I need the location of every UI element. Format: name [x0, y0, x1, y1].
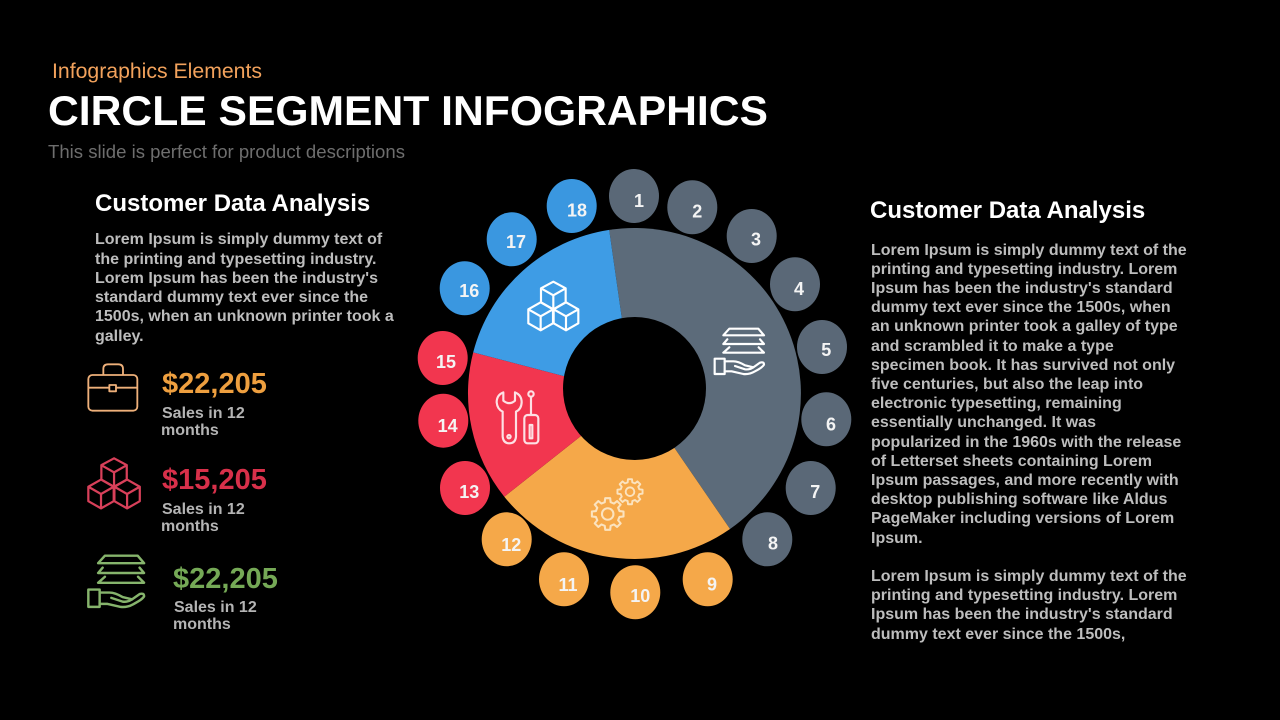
bubble 13: 13 — [459, 482, 479, 502]
right paragraphs: an unknown printer took a galley of type — [871, 318, 1178, 335]
segment: red — [468, 352, 634, 497]
bubble 1: 1 — [634, 191, 644, 211]
bubble 6 — [801, 392, 851, 446]
bubble 11 — [539, 552, 589, 606]
donut hole — [563, 317, 706, 460]
bubble 12: 12 — [501, 535, 521, 555]
bubble 17: 17 — [506, 232, 526, 252]
bubble 5 — [797, 320, 847, 374]
segment: gray — [609, 228, 801, 529]
left paragraph: galley. — [95, 328, 144, 345]
right paragraphs: specimen book. It has survived not only — [871, 357, 1175, 374]
right paragraphs: printing and typesetting industry. Lorem — [871, 587, 1177, 604]
bubble 8: 8 — [768, 534, 778, 554]
stat: green sales — [88, 556, 278, 633]
icon: wrench and screwdriver — [497, 391, 538, 443]
bubble 1 — [609, 169, 659, 223]
right paragraphs: essentially unchanged. It was — [871, 414, 1096, 431]
right paragraphs: Ipsum has been the industry's standard — [871, 606, 1173, 623]
title: CIRCLE SEGMENT INFOGRAPHICS — [48, 87, 768, 134]
right paragraphs: and scrambled it to make a type — [871, 338, 1114, 355]
green caption: Sales in 12 — [174, 599, 257, 616]
bubble 16 — [440, 261, 490, 315]
right paragraphs: Lorem Ipsum is simply dummy text of the — [871, 568, 1187, 585]
icon: cubes red — [88, 458, 140, 508]
bubble 7: 7 — [810, 482, 820, 502]
icon: hand with layers green — [88, 556, 144, 607]
bubble 14: 14 — [438, 416, 458, 436]
bubble 15 — [418, 331, 468, 385]
bubble 4: 4 — [794, 279, 804, 299]
bubble 9: 9 — [707, 574, 717, 594]
bubble 14 — [418, 394, 468, 448]
eyebrow label: Infographics Elements — [52, 60, 262, 83]
numbered bubbles ring — [418, 169, 851, 619]
icon: cubes — [528, 282, 578, 330]
icon: briefcase — [88, 364, 137, 411]
segment: blue — [473, 230, 634, 388]
right paragraphs: Ipsum. — [871, 530, 923, 547]
left paragraph: the printing and typesetting industry. — [95, 251, 376, 268]
green caption: months — [173, 616, 231, 633]
panel: right customer data analysis — [870, 197, 1191, 643]
bubble 7 — [786, 461, 836, 515]
bubble 11: 11 — [558, 575, 578, 595]
orange caption: months — [161, 422, 219, 439]
right paragraphs: dummy text ever since the 1500s, — [871, 626, 1125, 643]
bubble 2 — [667, 180, 717, 234]
panel: left customer data analysis — [88, 190, 398, 633]
left paragraph: Lorem Ipsum is simply dummy text of — [95, 231, 383, 248]
bubble 3: 3 — [751, 230, 761, 250]
bubble 12 — [482, 512, 532, 566]
orange value: $22,205 — [162, 368, 267, 400]
bubble 17 — [487, 212, 537, 266]
right paragraphs: popularized in the 1960s with the release — [871, 434, 1181, 451]
donut chart with segments — [468, 228, 801, 559]
green value: $22,205 — [173, 563, 278, 595]
right paragraphs: of Letterset sheets containing Lorem — [871, 453, 1152, 470]
red caption: months — [161, 518, 219, 535]
bubble 4 — [770, 257, 820, 311]
red value: $15,205 — [162, 464, 267, 496]
stat: orange sales — [88, 364, 267, 439]
right paragraphs: electronic typesetting, remaining — [871, 395, 1122, 412]
right paragraphs: Lorem Ipsum is simply dummy text of the — [871, 242, 1187, 259]
left paragraph: standard dummy text ever since the — [95, 289, 368, 306]
stat: red sales — [88, 458, 267, 535]
bubble 15: 15 — [436, 352, 456, 372]
bubble 9 — [683, 552, 733, 606]
right paragraphs: five centuries, but also the leap into — [871, 376, 1143, 393]
right paragraphs: Ipsum passages, and more recently with — [871, 472, 1179, 489]
left paragraph: Lorem Ipsum has been the industry's — [95, 270, 378, 287]
bubble 18: 18 — [567, 200, 587, 220]
bubble 16: 16 — [459, 281, 479, 301]
bubble 18 — [547, 179, 597, 233]
bubble 8 — [742, 512, 792, 566]
bubble 13 — [440, 461, 490, 515]
orange caption: Sales in 12 — [162, 405, 245, 422]
segment: orange — [504, 388, 730, 559]
bubble 2: 2 — [692, 202, 702, 222]
right paragraphs: desktop publishing software like Aldus — [871, 491, 1167, 508]
right paragraphs: Ipsum has been the industry's standard — [871, 280, 1173, 297]
left paragraph: 1500s, when an unknown printer took a — [95, 308, 394, 325]
header — [48, 60, 768, 162]
subtitle: This slide is perfect for product descriptions — [48, 141, 405, 162]
bubble 10 — [610, 565, 660, 619]
red caption: Sales in 12 — [162, 501, 245, 518]
right paragraphs: printing and typesetting industry. Lorem — [871, 261, 1177, 278]
right paragraphs: PageMaker including versions of Lorem — [871, 510, 1174, 527]
bubble 10: 10 — [630, 586, 650, 606]
icon: gears — [592, 479, 643, 530]
icon: hand with layers — [715, 329, 764, 374]
right heading: Customer Data Analysis — [870, 197, 1145, 224]
bubble 3 — [727, 209, 777, 263]
bubble 5: 5 — [821, 340, 831, 360]
left heading: Customer Data Analysis — [95, 190, 370, 217]
bubble 6: 6 — [826, 414, 836, 434]
right paragraphs: dummy text ever since the 1500s, when — [871, 299, 1171, 316]
